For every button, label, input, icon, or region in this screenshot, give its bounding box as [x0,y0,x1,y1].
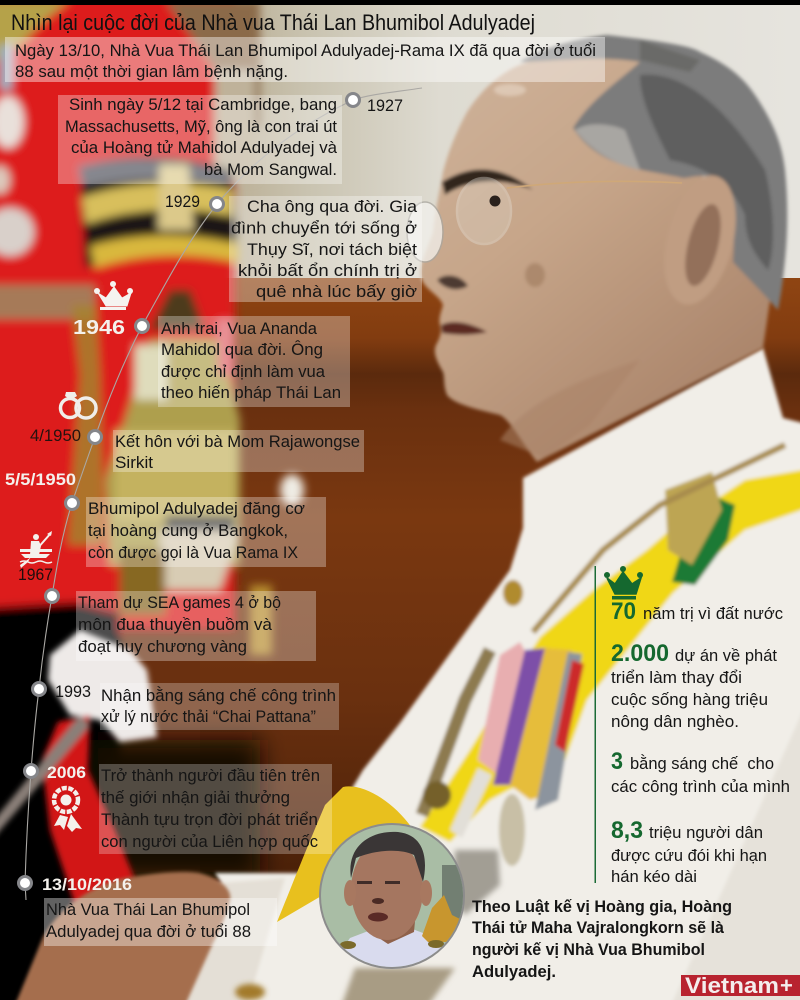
text box 1967: Tham dự SEA games 4 ở bộ [78,593,281,612]
marker 1927 [346,94,360,106]
text box 1929: khỏi bất ổn chính trị ở [238,261,417,280]
year 1927: 1927 [367,96,403,115]
marker 2006 [24,764,38,778]
text box 1946: được chỉ định làm vua [161,362,326,381]
hand [13,872,230,1000]
stat: 70 years [611,598,783,625]
stat: 3 patents: 3 [611,748,623,775]
event 1967 [18,531,316,661]
text box 1927 [58,95,342,184]
successor note [472,897,732,981]
icon: award rosette [54,788,82,832]
marker 1993 [32,682,46,696]
year 1967: 1967 [18,565,53,584]
text box 5/5/1950: còn được gọi là Vua Rama IX [88,543,298,562]
text box 1946: theo hiến pháp Thái Lan [161,383,341,402]
stat: 8.3 million [611,817,767,886]
panel: intro: 88 sau một thời gian lâm bệnh nặng. [15,62,288,81]
marker 4/1950 [88,430,102,444]
panel: intro [5,37,605,82]
year 2006: 2006 [47,763,86,782]
logo: Vietnam+: Vietnam [685,973,779,998]
stat: 3 patents [611,748,790,796]
event 1929 [165,192,422,302]
text box 4/1950 [113,430,364,472]
text box 1929: quê nhà lúc bấy giờ [256,282,417,301]
stat: 2000 projects [611,640,777,731]
text box 5/5/1950: tại hoàng cung ở Bangkok, [88,521,288,540]
text box 1927: Massachusetts, Mỹ, ông là con trai út [65,117,337,136]
stat: 8.3 million: 8,3 [611,817,643,844]
timeline line [25,88,422,900]
text box 2006: Trở thành người đầu tiên trên [101,766,320,785]
event 4/1950 [30,392,364,472]
panel: intro: Ngày 13/10, Nhà Vua Thái Lan Bhumipol Adulyadej-Rama IX đã qua đời ở tuổi [15,41,596,60]
text box 5/5/1950 [86,497,326,567]
date 4/1950: 4/1950 [30,426,81,445]
marker 1967 [46,590,58,602]
vertical divider [594,566,596,883]
marker 2016 [18,876,32,890]
eyeglasses [407,178,682,262]
successor note: Theo Luật kế vị Hoàng gia, Hoàng [472,897,732,916]
text box 1929 [229,196,422,302]
event 1993 [32,682,339,730]
text box 1929: Thụy Sĩ, nơi tách biệt [247,240,417,259]
stat: 2000 projects: triển làm thay đổi [611,668,742,687]
stat: 2000 projects: nông dân nghèo. [611,712,739,731]
stat: 3 patents: các công trình của mình [611,777,790,796]
text box 2016: Nhà Vua Thái Lan Bhumipol [46,900,250,919]
text box 4/1950: Kết hôn với bà Mom Rajawongse [115,432,360,451]
year 1993: 1993 [55,682,91,701]
event 2006 [24,763,332,854]
text box 1967 [76,591,316,661]
marker 5/5/1950 [66,496,78,510]
text box 1927: của Hoàng tử Mahidol Adulyadej và [71,138,338,157]
stat: 70 years: 70 [611,598,636,625]
title: Nhìn lại cuộc đời của Nhà vua Thái Lan Bhumibol Adulyadej [11,10,535,35]
text box 2016: Adulyadej qua đời ở tuổi 88 [46,922,251,941]
successor note: người kế vị Nhà Vua Bhumibol [472,940,705,959]
text box 1929: đình chuyển tới sống ở [231,218,417,238]
text box 2006: Thành tựu trọn đời phát triển [101,810,318,829]
icon: green crown [604,566,643,600]
date 5/5/1950: 5/5/1950 [5,470,76,489]
text box 1946 [158,316,350,407]
stat: 2000 projects: dự án về phát [675,646,777,665]
text box 1929: Cha ông qua đời. Gia [247,197,418,216]
text box 1927: Sinh ngày 5/12 tại Cambridge, bang [69,95,337,114]
portrait: Crown Prince Vajiralongkorn [319,823,465,975]
text box 1993: xử lý nước thải “Chai Pattana” [101,707,316,726]
text box 2006: thế giới nhận giải thưởng [101,788,290,807]
stat: 70 years: năm trị vì đất nước [643,604,783,623]
top black strip [0,0,800,5]
icon: white crown [94,281,133,310]
marker 1946 [136,320,148,332]
text box 2006 [99,764,332,854]
event 13/10/2016 [18,875,277,946]
text box 1946: Anh trai, Vua Ananda [161,319,318,338]
text box 1927: bà Mom Sangwal. [204,160,337,179]
stat: 8.3 million: triệu người dân [649,823,763,842]
text box 2006: con người của Liên hợp quốc [101,832,318,851]
text box 2016 [44,898,277,946]
text box 1946: Mahidol qua đời. Ông [161,340,323,359]
text box 5/5/1950: Bhumipol Adulyadej đăng cơ [88,499,305,518]
text box 4/1950: Sirkit [115,453,153,472]
event 1946 [73,281,350,407]
panel: key statistics [594,566,790,886]
text box 1967: đoạt huy chương vàng [78,637,247,656]
text box 1993 [100,683,339,730]
left blurred uniform [0,0,304,1000]
year 1946: 1946 [73,317,125,339]
stat: 3 patents: bằng sáng chế cho [630,754,774,773]
dark shadow behind ribbon [90,740,260,880]
date 13/10/2016: 13/10/2016 [42,875,132,894]
icon: kayak [20,531,52,568]
text box 1967: môn đua thuyền buồm và [78,615,273,634]
king head [420,35,787,462]
event 5/5/1950 [5,470,326,567]
successor note: Adulyadej. [472,962,556,981]
glove and red ribbon [0,630,157,905]
text box 1993: Nhận bằng sáng chế công trình [101,686,336,705]
icon: wedding rings [60,392,96,418]
event 1927 [58,94,403,184]
white uniform [176,348,800,1000]
marker 1929 [210,198,224,210]
stat: 2000 projects: cuộc sống hàng triệu [611,690,768,709]
yellow sash fold [277,786,412,922]
logo: Vietnam+: + [780,973,793,998]
stat: 2000 projects: 2.000 [611,640,669,667]
year 1929: 1929 [165,192,200,211]
stat: 8.3 million: hán kéo dài [611,867,697,886]
stat: 8.3 million: được cứu đói khi hạn [611,846,767,865]
successor note: Thái tử Maha Vajralongkorn sẽ là [472,918,725,937]
